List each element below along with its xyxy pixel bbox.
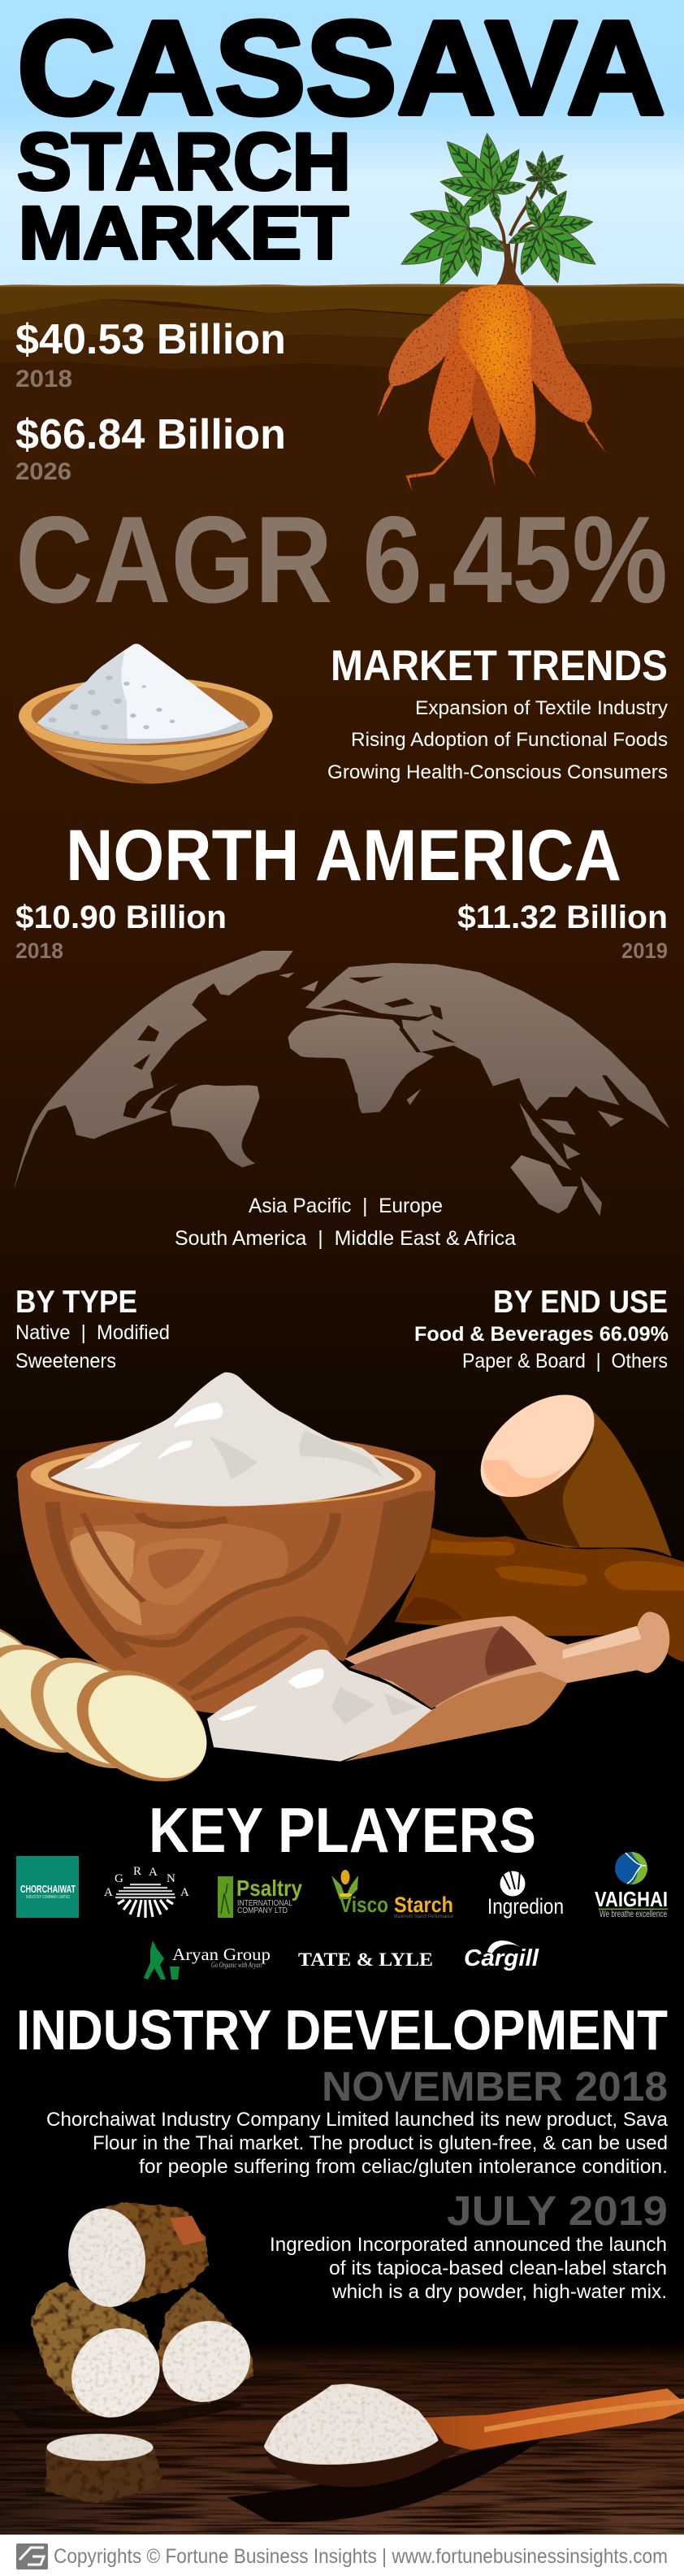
logo: Aryan Group: Go Organic with Aryan <box>211 1961 262 1969</box>
development: November 2018: for people suffering from celiac/gluten intolerance condition. <box>139 2156 668 2178</box>
logo: Chorchaiwat <box>16 1856 79 1918</box>
market size 2026: $66.84 Billion <box>15 411 286 458</box>
logo: Ingredion <box>487 1871 564 1919</box>
North America 2019 value: $11.32 Billion <box>457 900 668 935</box>
panel: market trends: Rising Adoption of Functional Foods <box>351 729 668 751</box>
panel: by end use: BY END USE <box>493 1285 668 1320</box>
development: July 2019: JULY 2019 <box>447 2188 668 2234</box>
icon: small bowl of starch <box>19 644 273 784</box>
panel: by end use: Food & Beverages 66.09% <box>414 1323 669 1346</box>
logo: Agrana: G <box>115 1872 123 1885</box>
panel: by type <box>15 1285 170 1373</box>
development: July 2019: which is a dry powder, high-water mix. <box>331 2281 667 2303</box>
illustration: bowl, cassava roots, slices and scoop <box>0 1373 684 1795</box>
title <box>17 0 665 275</box>
market size 2018: $40.53 Billion <box>15 316 286 363</box>
logo: Ingredion: Ingredion <box>487 1894 564 1919</box>
panel: market trends: Expansion of Textile Industry <box>415 697 668 719</box>
logo: Agrana <box>104 1865 189 1918</box>
world map <box>14 951 669 1216</box>
development: November 2018: Chorchaiwat Industry Company Limited launched its new product, Sava <box>46 2109 669 2131</box>
panel: by type: Sweeteners <box>15 1350 116 1373</box>
development: November 2018: NOVEMBER 2018 <box>322 2063 668 2110</box>
panel: by end use: Paper & Board | Others <box>462 1350 668 1373</box>
development: July 2019: of its tapioca-based clean-label starch <box>329 2257 667 2279</box>
logo: Tate & Lyle: TATE & LYLE <box>298 1949 433 1970</box>
logo: Vaighai <box>595 1852 668 1919</box>
development: November 2018 <box>46 2063 669 2178</box>
logo: Vaighai: VAIGHAI <box>595 1887 668 1911</box>
development: July 2019 <box>270 2188 668 2303</box>
market size 2026: 2026 <box>15 458 71 485</box>
development: July 2019: Ingredion Incorporated announced the launch <box>270 2234 667 2256</box>
panel: by type: BY TYPE <box>15 1285 137 1320</box>
logo: Psaltry: COMPANY LTD <box>237 1906 288 1915</box>
heading: North America: NORTH AMERICA <box>66 814 621 896</box>
heading: key players: KEY PLAYERS <box>149 1794 536 1866</box>
logo: Visco Starch <box>331 1870 454 1919</box>
logo: Agrana: A <box>149 1866 158 1879</box>
logo: Aryan Group: Aryan Group <box>172 1945 271 1964</box>
North America 2018 value <box>15 900 227 963</box>
logo: Agrana: A <box>104 1886 113 1899</box>
North America 2019 value <box>457 900 668 963</box>
other regions list: Asia Pacific | Europe <box>249 1195 443 1217</box>
photo: cassava and starch on wooden table <box>0 2202 684 2535</box>
North America 2018 value: 2018 <box>15 939 63 963</box>
market size 2018 <box>15 316 286 392</box>
logo: Psaltry: Psaltry <box>236 1876 302 1901</box>
market size 2026 <box>15 411 286 485</box>
title: MARKET <box>19 192 348 275</box>
icon: Fortune Business Insights logo <box>16 2543 48 2569</box>
soil layers <box>0 284 684 370</box>
logo: Cargill: Cargill <box>464 1945 539 1971</box>
title: STARCH <box>17 116 351 206</box>
panel: market trends: Growing Health-Conscious Consumers <box>327 761 668 783</box>
panel: market trends <box>327 642 668 783</box>
panel: footer band <box>0 2535 684 2576</box>
icon: cassava plant leaves <box>395 132 602 291</box>
logo: Visco Starch: Starch <box>394 1893 453 1917</box>
panel: by end use <box>414 1285 669 1373</box>
logo: Chorchaiwat: INDUSTRY COMPANY LIMITED <box>26 1895 70 1900</box>
logo: Agrana: A <box>180 1886 189 1899</box>
other regions list: South America | Middle East & Africa <box>175 1227 516 1250</box>
logo: Chorchaiwat: CHORCHAIWAT <box>20 1883 76 1895</box>
logo: Agrana: N <box>167 1872 175 1885</box>
other regions list <box>175 1195 516 1250</box>
North America 2019 value: 2019 <box>621 939 668 963</box>
logo: Psaltry <box>218 1876 302 1918</box>
logo: Aryan Group <box>144 1941 271 1980</box>
logo: Visco Starch: Maximum Starch Performance <box>394 1915 454 1919</box>
logo: Psaltry: INTERNATIONAL <box>237 1899 292 1908</box>
market size 2018: 2018 <box>15 366 72 392</box>
North America 2018 value: $10.90 Billion <box>15 900 227 935</box>
logo: Agrana: R <box>133 1865 141 1878</box>
logo: Visco Starch: Visco <box>340 1893 388 1917</box>
icon: cassava roots <box>378 284 606 491</box>
panel: by type: Native | Modified <box>15 1321 170 1344</box>
panel: sky background <box>0 0 684 288</box>
development: November 2018: Flour in the Thai market. The product is gluten-free, & can be used <box>93 2132 668 2154</box>
